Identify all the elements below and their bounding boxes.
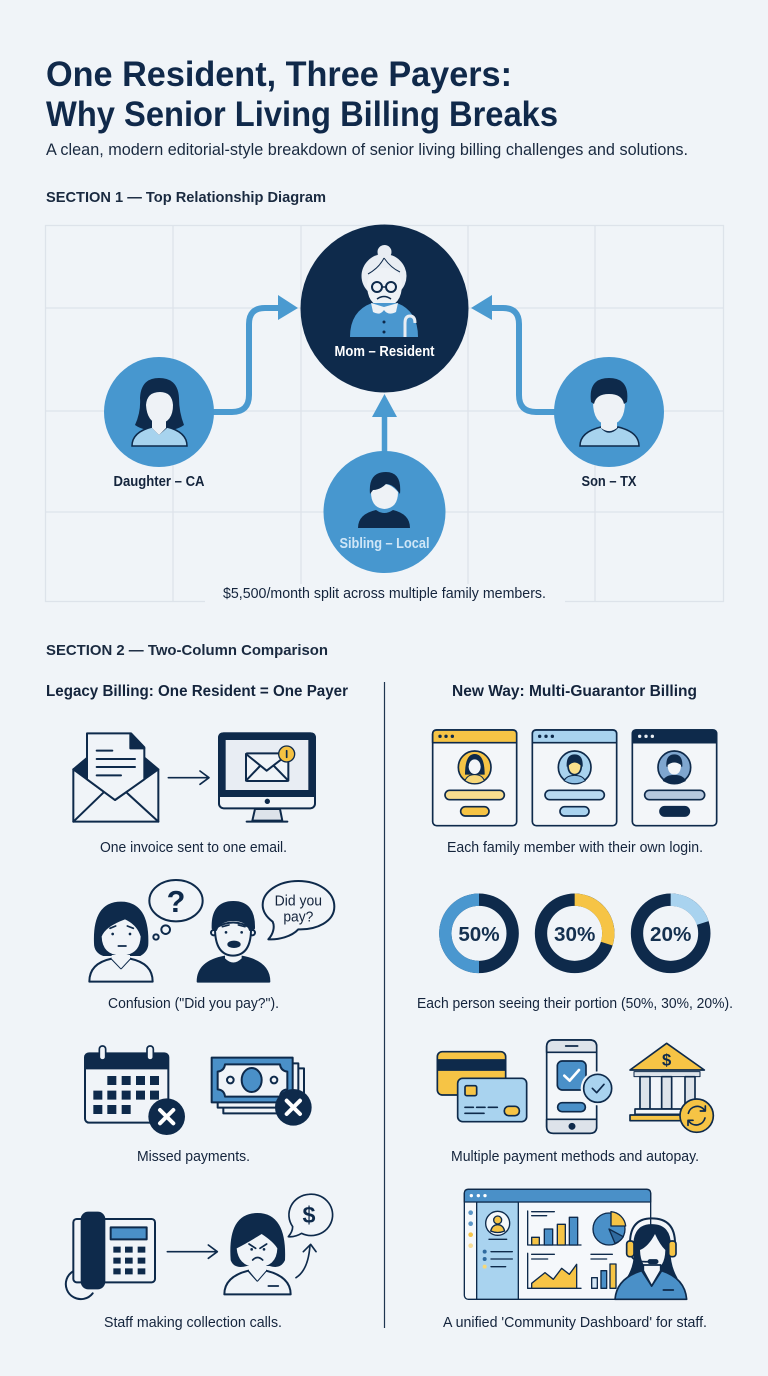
icon: bank with autopay (630, 1043, 713, 1132)
caption: community dashboard: A unified 'Community Dashboard' for staff. (443, 1315, 707, 1331)
icon: yellow login window (433, 730, 517, 826)
legacy column heading: Legacy Billing: One Resident = One Payer (46, 683, 348, 700)
donut: 30% (541, 900, 608, 967)
section 1 heading: SECTION 1 — Top Relationship Diagram (46, 189, 326, 206)
donut: 30%: 30% (554, 923, 595, 946)
panel: relationship diagram (45, 224, 724, 604)
node: daughter: Daughter – CA (114, 474, 205, 490)
icon: dollar speech bubble: $ (303, 1202, 316, 1228)
title (46, 55, 558, 134)
donut: 20% (637, 900, 704, 967)
new way column heading: New Way: Multi-Guarantor Billing (452, 683, 697, 700)
panel: new way logins and portions (433, 730, 717, 967)
panel: new way payments and dashboard (437, 1040, 713, 1299)
donut: 20%: 20% (650, 923, 691, 946)
section 2 heading: SECTION 2 — Two-Column Comparison (46, 642, 328, 659)
node: daughter (104, 357, 214, 490)
arrow: sibling to mom (372, 394, 397, 455)
icon: dollar speech bubble (288, 1194, 333, 1278)
arrow: phone to staff (167, 1245, 217, 1258)
icon: navy login window (632, 730, 717, 826)
panel: legacy invoice and confusion icons (73, 733, 334, 982)
caption: one invoice: One invoice sent to one email. (100, 840, 287, 856)
panel: legacy missed payments and collection icons (66, 1046, 333, 1299)
icon: support agent with headset (615, 1218, 687, 1299)
icon: smartphone payment (547, 1040, 615, 1133)
caption: payment methods: Multiple payment methods and autopay. (451, 1149, 699, 1165)
diagram caption: $5,500/month split across multiple family members. (223, 586, 546, 602)
icon: calendar with x (85, 1046, 185, 1135)
title: Why Senior Living Billing Breaks (46, 95, 558, 134)
node: sibling: Sibling – Local (340, 536, 430, 552)
icon: frustrated staff member (224, 1214, 291, 1294)
arrow: daughter to mom (212, 295, 298, 412)
donut: 50% (445, 900, 513, 967)
icon: light blue login window (532, 730, 617, 826)
icon: cash with x (212, 1058, 312, 1126)
icon: worried woman with thought bubble (89, 880, 203, 982)
node: mom resident: Mom – Resident (334, 344, 435, 360)
title: One Resident, Three Payers: (46, 55, 512, 94)
icon: community dashboard (464, 1189, 651, 1299)
node: mom resident (300, 224, 468, 392)
caption: own login: Each family member with their own login. (447, 840, 703, 856)
caption: missed payments: Missed payments. (137, 1149, 250, 1165)
node: son (554, 357, 664, 490)
node: sibling (324, 451, 446, 573)
icon: worried man with speech bubble: Did you (275, 893, 322, 909)
node: son: Son – TX (582, 474, 637, 490)
icon: worried man with speech bubble: pay? (283, 909, 313, 925)
caption: portions: Each person seeing their portion (50%, 30%, 20%). (417, 996, 733, 1012)
subtitle: A clean, modern editorial-style breakdown of senior living billing challenges and solutions. (46, 141, 688, 159)
caption: collection calls: Staff making collection calls. (104, 1315, 282, 1331)
arrow: son to mom (471, 295, 557, 412)
icon: bank with autopay: $ (662, 1050, 672, 1069)
icon: payment cards (437, 1052, 527, 1122)
caption: confusion: Confusion ("Did you pay?"). (108, 996, 279, 1012)
icon: monitor with email alert (219, 733, 315, 822)
icon: desk phone (66, 1213, 155, 1299)
icon: worried woman with thought bubble: ? (167, 885, 185, 919)
icon: envelope with invoice (73, 733, 158, 822)
donut: 50%: 50% (458, 923, 500, 946)
icon: worried man with speech bubble (198, 881, 334, 982)
arrow: invoice to email (168, 771, 209, 784)
